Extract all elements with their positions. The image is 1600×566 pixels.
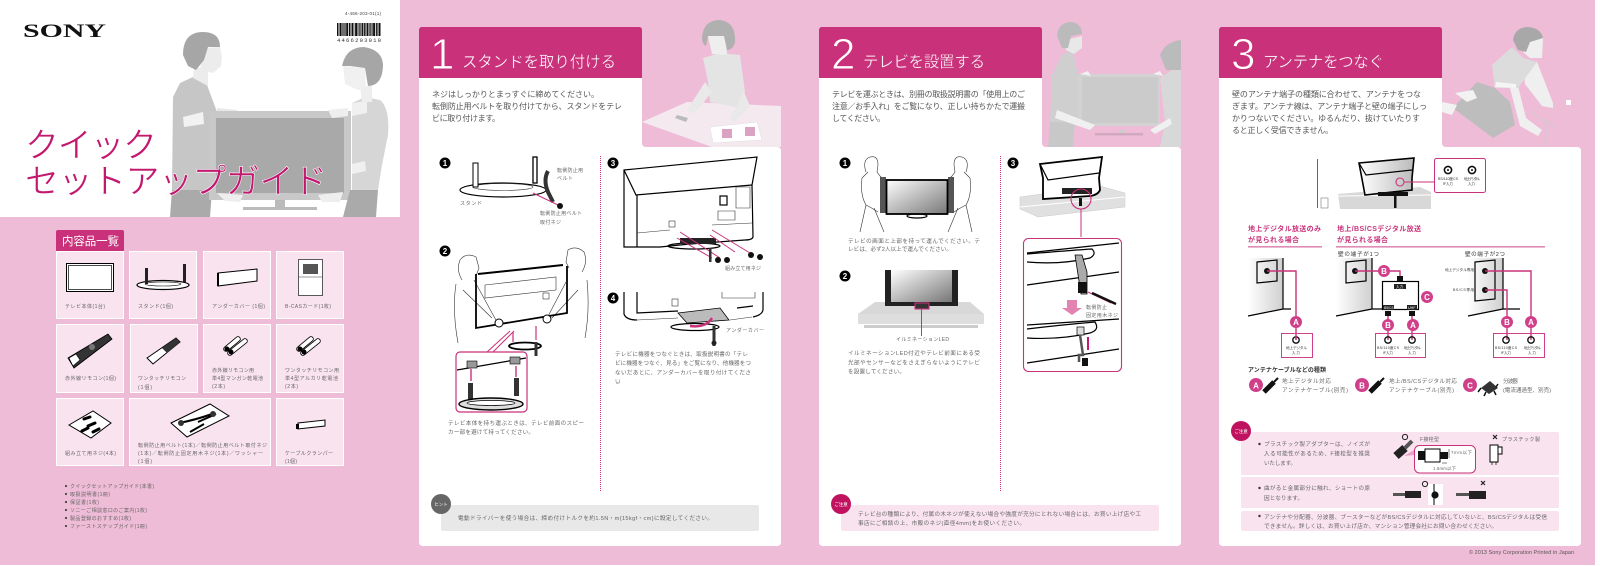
illustration: F connector type: 7mm以下 xyxy=(1451,450,1473,456)
heading: terrestrial BS CS xyxy=(1336,224,1545,248)
card: cable clamper xyxy=(276,398,344,466)
copyright: © 2013 Sony Corporation Printed in Japan xyxy=(1469,549,1574,556)
diagram: step 1-4 under cover: 4 xyxy=(611,294,616,303)
callout: TV antenna inputs: 入力 xyxy=(1468,181,1475,186)
legend: cable types: A xyxy=(1253,382,1259,390)
diagram: step 2-1 carrying: 1 xyxy=(843,159,848,168)
diagram: antenna connection one wall terminal: 入力 xyxy=(1396,284,1404,289)
panel: cover xyxy=(0,0,400,217)
legend: cable types: アンテナケーブル(別売) xyxy=(1282,386,1348,394)
callout: screw detail: 転倒防止 xyxy=(1086,304,1107,311)
diagram: antenna connection A: 地上デジタル xyxy=(1286,345,1307,350)
diagram: step 1-2 two people placing TV on stand xyxy=(440,246,588,436)
diagram: step 1-1 stand and belt xyxy=(440,157,583,226)
card: belt and screws: (1個) xyxy=(138,458,152,465)
legend: cable types: C xyxy=(1467,382,1473,390)
diagram: step 1-1 stand and belt: 転倒防止用ベルト xyxy=(540,210,582,217)
diagram: step 1-1 stand and belt: スタンド xyxy=(460,200,482,207)
diagram: step 1-4 under cover: ないだあとに、アンダーカバーを取り付けてくださ xyxy=(615,368,751,376)
card: alkaline batteries: 単4型アルカリ乾電池 xyxy=(285,375,338,382)
part number: 4-466-203-01(1) xyxy=(345,11,381,16)
card: one-touch remote: ワンタッチリモコン xyxy=(138,375,186,382)
illustration: plastic adapter xyxy=(1490,435,1540,465)
heading: terrestrial only xyxy=(1248,224,1322,248)
illustration: F connector type xyxy=(1396,434,1476,473)
heading: terrestrial BS CS: 地上/BS/CSデジタル放送 xyxy=(1337,224,1421,233)
diagram: step 1-1 stand and belt: 転倒防止用 xyxy=(557,167,583,174)
list: other items: 取扱説明書(1冊) xyxy=(70,491,110,498)
diagram: step 1-3 screw in stand: 3 xyxy=(611,159,616,168)
callout: TV antenna inputs: IF入力 xyxy=(1443,181,1453,186)
diagram: step 2-1 carrying: レビは、必ず2人以上で運んでください。 xyxy=(848,245,952,253)
callout: hint: ヒント xyxy=(434,502,448,507)
text: step 3 intro: ると正しく受信できません。 xyxy=(1232,125,1333,135)
card: manganese batteries: 単4型マンガン乾電池 xyxy=(212,375,263,382)
callout: antenna cautions: ご注意 xyxy=(1234,428,1248,435)
legend: cable types: アンテナケーブルなどの種類 xyxy=(1248,366,1326,374)
text: step 1 intro: ネジはしっかりとまっすぐに締めてください。 xyxy=(432,89,599,99)
text: step 1 intro: 転倒防止用ベルトを取り付けてから、スタンドをテレ xyxy=(432,101,622,111)
heading: step 3: 3 xyxy=(1231,30,1255,79)
illustration: two people carrying TV xyxy=(1048,22,1181,147)
illustration: plastic adapter: プラスチック製 xyxy=(1502,436,1540,443)
card: TV: テレビ本体(1台) xyxy=(65,303,105,310)
diagram: antenna connection one wall terminal xyxy=(1336,250,1433,358)
diagram: step 2-2 placing on stand xyxy=(840,270,984,376)
diagram: antenna connection one wall terminal: 入力 xyxy=(1408,350,1416,355)
callout: screw detail xyxy=(1024,238,1122,372)
list: other items: クイックセットアップガイド(本書) xyxy=(70,483,154,490)
text: step 3 intro: 壁のアンテナ端子の種類に合わせて、アンテナをつな xyxy=(1232,89,1421,99)
diagram: antenna connection two wall terminals: BS/CS専用 xyxy=(1453,287,1474,292)
card: under cover xyxy=(204,252,270,318)
card: belt and screws: 転倒防止用ベルト(1本)／転倒防止用ベルト取付ネジ xyxy=(138,442,267,449)
diagram: antenna connection one wall terminal: 壁の端子が1つ xyxy=(1338,250,1379,258)
callout: step 2 caution: 事店にご相談の上、市販のネジ(直径4mm)をお使いください。 xyxy=(858,519,1025,527)
diagram: antenna connection two wall terminals: A xyxy=(1528,318,1534,327)
diagram: antenna connection one wall terminal: C xyxy=(1424,293,1430,302)
diagram: step 1-1 stand and belt: 1 xyxy=(443,159,448,168)
diagram: antenna connection two wall terminals xyxy=(1445,250,1544,358)
diagram: antenna connection two wall terminals: 壁の端子が2つ xyxy=(1465,250,1505,258)
card: assembly screws: 組み立て用ネジ(4本) xyxy=(65,450,116,457)
card: belt and screws: (1本)／転倒防止固定用木ネジ(1本)／ワッシャー xyxy=(138,450,263,457)
diagram: step 2-3 fixing screw: 3 xyxy=(1011,159,1016,168)
logo: SONY: SONY xyxy=(23,21,106,42)
callout: TV antenna inputs: BS/110度CS xyxy=(1438,176,1459,181)
title: セットアップガイド xyxy=(25,163,327,201)
diagram: antenna connection one wall terminal: BS/CS xyxy=(1384,306,1394,310)
diagram: step 1-4 under cover: テレビに機器をつなぐときは、取扱説明書の「テレ xyxy=(615,350,748,358)
card: cable clamper: ケーブルクランパー xyxy=(285,450,333,457)
heading: terrestrial only: が見られる場合 xyxy=(1248,235,1299,244)
diagram: step 1-1 stand and belt: ベルト xyxy=(557,176,573,182)
diagram: antenna connection A: A xyxy=(1293,318,1299,327)
illustration: person kneeling at wall xyxy=(1442,27,1571,147)
callout: antenna cautions: いたします。 xyxy=(1264,460,1296,467)
card: TV xyxy=(56,252,124,318)
heading: step 1 xyxy=(419,27,642,79)
text: step 2 intro xyxy=(832,89,1025,123)
diagram: step 2-3 fixing screw xyxy=(1008,157,1125,372)
diagram: step 2-2 placing on stand: イルミネーションLED付近やテレビ前面にある受 xyxy=(848,349,980,357)
panel: step 2 install TV xyxy=(819,22,1181,546)
diagram: step 2-2 placing on stand: を設置してください。 xyxy=(848,368,905,376)
text: step 2 intro: テレビを運ぶときは、別冊の取扱説明書の「使用上のご xyxy=(832,89,1025,99)
callout: hint xyxy=(431,494,759,531)
callout: antenna cautions: 曲がると金属部分に触れ、ショートの原 xyxy=(1264,484,1370,492)
callout: step 2 caution: テレビ台の種類により、付属の木ネジが使えない場合や強度が充分にとれない場合には、お買い上げ店や工 xyxy=(858,510,1141,518)
diagram: antenna connection A: 入力 xyxy=(1292,350,1300,355)
illustration: television xyxy=(209,111,351,210)
text: step 2 intro: してください。 xyxy=(832,114,885,123)
callout: antenna cautions: 入る可能性があるため、F接栓型を推奨 xyxy=(1264,450,1370,458)
heading: step 2: テレビを設置する xyxy=(863,53,985,71)
callout: screw detail: 固定用木ネジ xyxy=(1086,312,1118,319)
diagram: step 1-2 two people placing TV on stand: カー部を避けて持ってください。 xyxy=(448,428,534,436)
diagram: antenna connection one wall terminal: B xyxy=(1385,321,1391,330)
legend: cable types: 分波器 xyxy=(1503,377,1518,385)
callout: antenna cautions: アンテナや分配器、分波器、ブースターなどがBS/CSデジタルに対応していないと、BS/CSデジタルは受信 xyxy=(1264,513,1547,521)
diagram: step 2-2 placing on stand: イルミネーションLED xyxy=(896,337,949,343)
legend: cable types: アンテナケーブル(別売) xyxy=(1389,386,1454,394)
legend: cable types: 地上/BS/CSデジタル対応 xyxy=(1389,377,1457,385)
list: other items: 保証書(1枚) xyxy=(70,499,99,506)
card: belt and screws xyxy=(130,398,270,466)
callout: step 2 caution: ご注意 xyxy=(834,501,848,508)
diagram: step 1-3 screw in stand xyxy=(608,157,763,272)
diagram: antenna connection one wall terminal: UHF xyxy=(1408,306,1416,310)
callout: antenna cautions: 因となります。 xyxy=(1264,495,1303,502)
callout: antenna cautions xyxy=(1231,421,1559,531)
diagram: TV and antenna terminal location xyxy=(1318,158,1486,209)
diagram: step 2-1 carrying: テレビの画面と上部を持って運んでください。テ xyxy=(848,237,980,245)
title xyxy=(25,127,327,201)
diagram: step 1-4 under cover xyxy=(608,292,764,386)
diagram: antenna connection two wall terminals: 入力 xyxy=(1528,350,1536,355)
diagram: step 2-2 placing on stand: 2 xyxy=(843,272,848,281)
heading: step 3 xyxy=(1219,27,1442,79)
callout: stand alignment detail xyxy=(456,331,527,412)
card: stand: スタンド(1個) xyxy=(138,303,173,310)
card: cable clamper: (1個) xyxy=(285,458,297,465)
card: IR remote xyxy=(56,324,124,392)
legend: cable types xyxy=(1248,366,1551,396)
diagram: antenna connection one wall terminal: 地上デジタル xyxy=(1404,345,1421,350)
text: step 3 intro xyxy=(1232,89,1427,135)
heading: terrestrial only: 地上デジタル放送のみ xyxy=(1248,224,1321,233)
text: step 3 intro: ぎます。アンテナ線は、アンテナ端子と壁の端子にしっ xyxy=(1232,101,1427,111)
text: step 1 intro: ビに取り付けます。 xyxy=(432,113,500,123)
text: step 2 intro: 注意／お手入れ」をご覧になり、正しい持ちかたで運搬 xyxy=(832,101,1025,111)
list: other items: 製品登録のおすすめ(1枚) xyxy=(70,515,131,522)
card: assembly screws xyxy=(56,398,124,466)
text: step 1 intro xyxy=(432,89,622,123)
diagram: antenna connection two wall terminals: IF入力 xyxy=(1501,350,1511,355)
diagram: antenna connection two wall terminals: 地上デジタル xyxy=(1524,345,1541,350)
diagram: antenna connection one wall terminal: BS/110度CS xyxy=(1377,345,1400,350)
card: stand xyxy=(130,252,196,318)
diagram: antenna connection one wall terminal: A xyxy=(1410,321,1416,330)
heading: contents xyxy=(56,230,124,251)
heading: terrestrial BS CS: が見られる場合 xyxy=(1337,235,1388,244)
card: alkaline batteries: ワンタッチリモコン用 xyxy=(285,367,339,374)
callout: antenna cautions: プラスチック製アダプターは、ノイズが xyxy=(1264,440,1370,448)
text: step 3 intro: かりつないでください。ゆるんだり、抜けていたりす xyxy=(1232,113,1420,123)
callout: TV antenna inputs: 地上デジタル xyxy=(1464,176,1480,181)
panel: step 1 attach stand xyxy=(419,20,781,546)
card: alkaline batteries xyxy=(276,324,344,392)
card: manganese batteries: (2本) xyxy=(212,383,225,390)
diagram: antenna connection one wall terminal: IF入力 xyxy=(1383,350,1393,355)
card: B-CAS card: B-CASカード(1枚) xyxy=(285,303,331,310)
diagram: step 1-2 two people placing TV on stand: テレビ本体を持ち運ぶときは、テレビ前面のスピー xyxy=(448,419,584,427)
card: IR remote: 赤外線リモコン(1個) xyxy=(65,375,116,382)
list: other items: ソニーご相談窓口のご案内(1枚) xyxy=(70,507,147,514)
diagram: step 1-4 under cover: ビに機器をつなぐ、見る」をご覧になり、他機器をつ xyxy=(615,359,751,367)
illustration: bent conductor OK and NG xyxy=(1393,481,1486,505)
illustration: F connector type: 1.5mm以下 xyxy=(1433,466,1457,472)
diagram: antenna connection two wall terminals: 地上デジタル専用 xyxy=(1445,267,1474,272)
legend: cable types: B xyxy=(1359,382,1365,390)
callout: antenna cautions: できません。詳しくは、お買い上げ店か、マンション管理会社にお問い合わせください。 xyxy=(1264,522,1497,530)
card: one-touch remote xyxy=(130,324,198,392)
list: other items xyxy=(65,483,154,530)
title: クイック xyxy=(25,127,157,165)
heading: step 3: アンテナをつなぐ xyxy=(1263,53,1384,71)
panel: contents list xyxy=(56,230,344,530)
diagram: step 2-2 placing on stand: 光部やセンサーなどをさえぎらないようにテレビ xyxy=(848,358,980,366)
card: B-CAS card xyxy=(276,252,344,318)
illustration: woman carrying TV xyxy=(328,47,388,217)
diagram: step 1-4 under cover: アンダーカバー xyxy=(726,327,764,334)
diagram: step 1-1 stand and belt: 取付ネジ xyxy=(540,219,561,226)
diagram: step 1-2 two people placing TV on stand: 2 xyxy=(443,247,448,256)
barcode xyxy=(337,30,382,44)
diagram: antenna connection A xyxy=(1248,258,1312,358)
heading: step 2 xyxy=(819,27,1042,79)
legend: cable types: (電流通過型、別売) xyxy=(1503,386,1551,394)
heading: step 1: 1 xyxy=(430,30,454,79)
diagram: step 1-3 screw in stand: 組み立て用ネジ xyxy=(725,265,761,272)
list: other items: ファーストステップガイド(1冊) xyxy=(70,523,147,530)
card: alkaline batteries: (2本) xyxy=(285,383,298,390)
card: under cover: アンダーカバー (1個) xyxy=(212,303,265,310)
illustration: F connector type: F接栓型 xyxy=(1420,436,1439,443)
diagram: antenna connection two wall terminals: B xyxy=(1504,318,1510,327)
panel: step 3 connect antenna xyxy=(1219,27,1581,546)
diagram: step 1-4 under cover: い。 xyxy=(615,378,623,386)
illustration: man carrying TV xyxy=(170,32,237,217)
diagram: antenna connection one wall terminal: B xyxy=(1381,267,1387,276)
diagram: step 2-1 carrying xyxy=(840,157,980,253)
callout: TV antenna inputs xyxy=(1434,158,1486,192)
callout: hint: 電動ドライバーを使う場合は、締め付けトルクを約1.5N・m{15kgf・cm}に設定してください。 xyxy=(458,514,713,522)
heading: step 1: スタンドを取り付ける xyxy=(462,53,616,71)
callout: step 2 caution xyxy=(831,494,1159,531)
card: manganese batteries xyxy=(204,324,270,392)
diagram: antenna connection two wall terminals: BS/110度CS xyxy=(1495,345,1518,350)
legend: cable types: 地上デジタル対応 xyxy=(1282,377,1331,385)
heading: step 2: 2 xyxy=(831,30,855,79)
card: one-touch remote: (1個) xyxy=(138,384,152,391)
card: manganese batteries: 赤外線リモコン用 xyxy=(212,367,254,374)
illustration: woman at table xyxy=(642,20,781,147)
barcode: 4466203010 xyxy=(337,37,382,44)
heading: contents: 内容品一覧 xyxy=(62,234,119,248)
